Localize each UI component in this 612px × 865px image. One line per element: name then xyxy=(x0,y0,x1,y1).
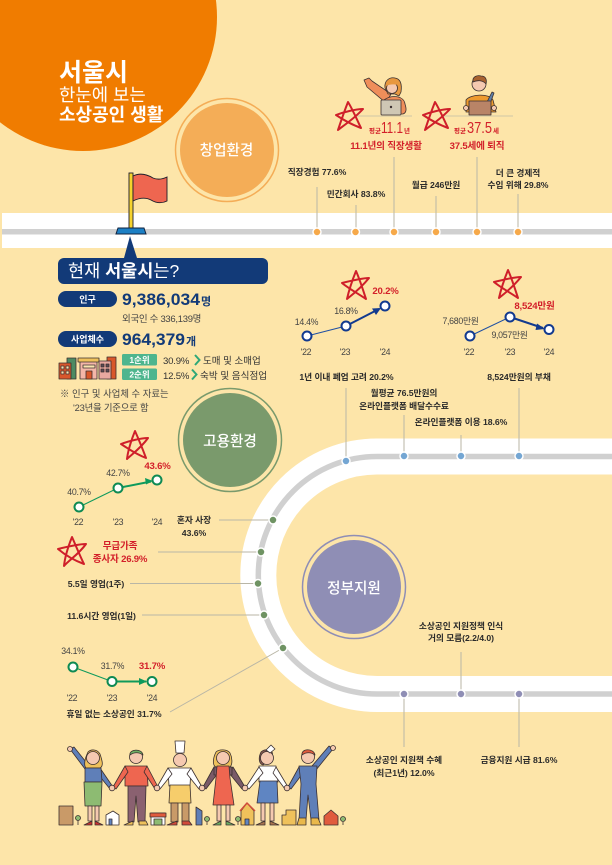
chart: solo owners: 42.7% xyxy=(106,468,130,478)
population: 인구 xyxy=(79,294,96,304)
labels: debt and closure xyxy=(299,371,551,427)
note: ※ 인구 및 사업체 수 자료는 xyxy=(60,388,169,399)
section circle: 정부지원: 정부지원 xyxy=(327,580,381,597)
illustration: people holding hands xyxy=(59,741,346,825)
chart: no holidays: '22 xyxy=(67,693,78,703)
labels: government support: 소상공인 지원정책 인식 xyxy=(419,620,503,631)
stat: average 37.5: 37.5 xyxy=(467,120,492,137)
section circle: 창업환경 xyxy=(176,98,278,202)
labels: debt and closure: 1년 이내 폐업 고려 20.2% xyxy=(299,371,394,382)
chart: closure intent: '23 xyxy=(340,347,351,357)
labels: 창업환경: 수입 위해 29.8% xyxy=(488,179,549,190)
star: 11.1 xyxy=(336,102,363,130)
chart: solo owners: '24 xyxy=(152,517,163,527)
chart: closure intent: 14.4% xyxy=(295,317,319,327)
labels: debt and closure: 월평균 76.5만원의 xyxy=(371,387,437,398)
title block xyxy=(0,0,217,151)
chart: solo owners xyxy=(67,461,171,527)
title block: 서울시 xyxy=(59,59,128,87)
person: woman in blue skirt xyxy=(246,745,288,825)
hands xyxy=(68,746,336,791)
stat: average 11.1 years: 평균 xyxy=(369,126,381,135)
population: 명 xyxy=(201,295,211,308)
chart: debt: '24 xyxy=(544,347,555,357)
labels: employment: 43.6% xyxy=(182,528,207,538)
labels: employment: 11.6시간 영업(1일) xyxy=(67,610,136,621)
banner heading xyxy=(58,236,268,284)
labels: government support: 소상공인 지원책 수혜 xyxy=(366,754,442,765)
chart: closure intent: '24 xyxy=(380,347,391,357)
labels: employment: 종사자 26.9% xyxy=(93,553,148,565)
star: 43.6 xyxy=(121,431,148,459)
middle road markers xyxy=(342,388,523,465)
top timeline markers xyxy=(313,157,522,236)
rank 1: 30.9% xyxy=(163,356,190,367)
chart: closure intent xyxy=(295,286,399,357)
businesses: 개 xyxy=(186,335,196,348)
stat: average 37.5 xyxy=(450,120,504,152)
chart: no holidays: '23 xyxy=(107,693,118,703)
labels: debt and closure: 온라인플랫폼 배달수수료 xyxy=(359,400,449,411)
businesses: 사업체수 xyxy=(71,334,104,344)
panel: current Seoul xyxy=(58,236,268,413)
person: woman in green skirt xyxy=(70,747,113,825)
flag xyxy=(116,173,167,234)
town buildings xyxy=(59,803,346,825)
labels: debt and closure: 온라인플랫폼 이용 18.6% xyxy=(415,416,508,427)
chart: solo owners: '23 xyxy=(113,517,124,527)
population: 외국인 수 336,139명 xyxy=(122,313,201,325)
chart: debt: 9,057만원 xyxy=(491,330,528,340)
section circle: 고용환경: 고용환경 xyxy=(203,433,257,450)
title block: 소상공인 생활 xyxy=(59,105,164,125)
stat: average 11.1 years: 11.1 xyxy=(381,120,403,137)
illustration: man with box xyxy=(442,76,513,116)
chart: closure intent: 16.8% xyxy=(334,306,358,316)
stat: average 11.1 years xyxy=(350,120,422,152)
stat: average 11.1 years: 11.1년의 직장생활 xyxy=(350,140,422,152)
section circle: 고용환경 xyxy=(178,388,282,492)
person: woman in red apron xyxy=(203,750,245,825)
labels: employment xyxy=(66,514,211,719)
chart: no holidays: '24 xyxy=(147,693,158,703)
labels: 창업환경: 월급 246만원 xyxy=(412,179,460,190)
rank 1: 1순위 xyxy=(129,355,150,365)
person: chef xyxy=(157,741,202,825)
chart: closure intent: '22 xyxy=(301,347,312,357)
person: worker in overalls xyxy=(288,746,333,825)
stat: average 37.5: 세 xyxy=(493,126,499,135)
star: 37.5 xyxy=(423,102,450,130)
labels: 창업환경 xyxy=(288,166,549,199)
chart: closure intent: 20.2% xyxy=(372,286,399,297)
icon: shop buildings xyxy=(59,357,116,379)
population xyxy=(58,291,211,325)
chart: no holidays xyxy=(61,646,166,703)
rank 2: 2순위 xyxy=(129,370,150,380)
top road xyxy=(2,213,612,248)
star: unpaid family workers xyxy=(58,537,86,566)
labels: employment: 휴일 없는 소상공인 31.7% xyxy=(66,708,162,719)
chart: no holidays: 31.7% xyxy=(101,661,125,671)
curved road xyxy=(258,456,612,694)
labels: employment: 5.5일 영업(1주) xyxy=(68,578,124,589)
illustration: woman with laptop xyxy=(355,78,412,116)
rank 2: 12.5% xyxy=(163,371,190,382)
rank 1 xyxy=(122,354,261,367)
stat: average 37.5: 평균 xyxy=(454,126,466,135)
chart: debt: '23 xyxy=(505,347,516,357)
section circle: 정부지원 xyxy=(302,536,406,638)
rank 2: 숙박 및 음식점업 xyxy=(200,370,267,382)
rank 2 xyxy=(122,368,267,382)
chart: debt xyxy=(442,300,555,357)
chart: solo owners: '22 xyxy=(73,517,84,527)
labels: government support: 거의 모름(2.2/4.0) xyxy=(428,632,494,643)
labels: government support: (최근1년) 12.0% xyxy=(373,767,435,778)
employment markers xyxy=(130,516,287,712)
labels: 창업환경: 더 큰 경제적 xyxy=(496,167,540,178)
star: 20.2 xyxy=(342,271,369,299)
government support markers xyxy=(400,652,523,747)
businesses xyxy=(58,331,196,349)
chart: solo owners: 43.6% xyxy=(144,461,171,472)
population: 9,386,034 xyxy=(122,291,201,309)
rank 1: 도매 및 소매업 xyxy=(203,355,261,367)
chart: debt: 8,524만원 xyxy=(514,300,555,312)
section circle: 창업환경: 창업환경 xyxy=(200,142,253,159)
stat: average 11.1 years: 년 xyxy=(404,126,410,135)
banner heading: 현재 서울시는? xyxy=(68,261,179,281)
note: '23년을 기준으로 함 xyxy=(73,402,149,413)
chart: debt: 7,680만원 xyxy=(442,316,479,326)
chart: no holidays: 31.7% xyxy=(139,661,166,672)
chart: debt: '22 xyxy=(464,347,475,357)
labels: debt and closure: 8,524만원의 부채 xyxy=(487,371,551,382)
chart: solo owners: 40.7% xyxy=(67,487,91,497)
person: man in red sweater xyxy=(113,750,158,825)
labels: employment: 무급가족 xyxy=(103,540,138,552)
title block: 한눈에 보는 xyxy=(59,85,146,105)
note xyxy=(60,388,169,413)
labels: government support xyxy=(366,620,558,778)
labels: 창업환경: 직장경험 77.6% xyxy=(288,166,347,177)
businesses: 964,379 xyxy=(122,331,185,349)
labels: 창업환경: 민간회사 83.8% xyxy=(327,188,386,199)
stat: average 37.5: 37.5세에 퇴직 xyxy=(450,140,504,152)
chart: no holidays: 34.1% xyxy=(61,646,85,656)
star: 8,524 xyxy=(494,270,521,298)
labels: government support: 금융지원 시급 81.6% xyxy=(481,754,558,765)
labels: employment: 혼자 사장 xyxy=(177,514,211,525)
